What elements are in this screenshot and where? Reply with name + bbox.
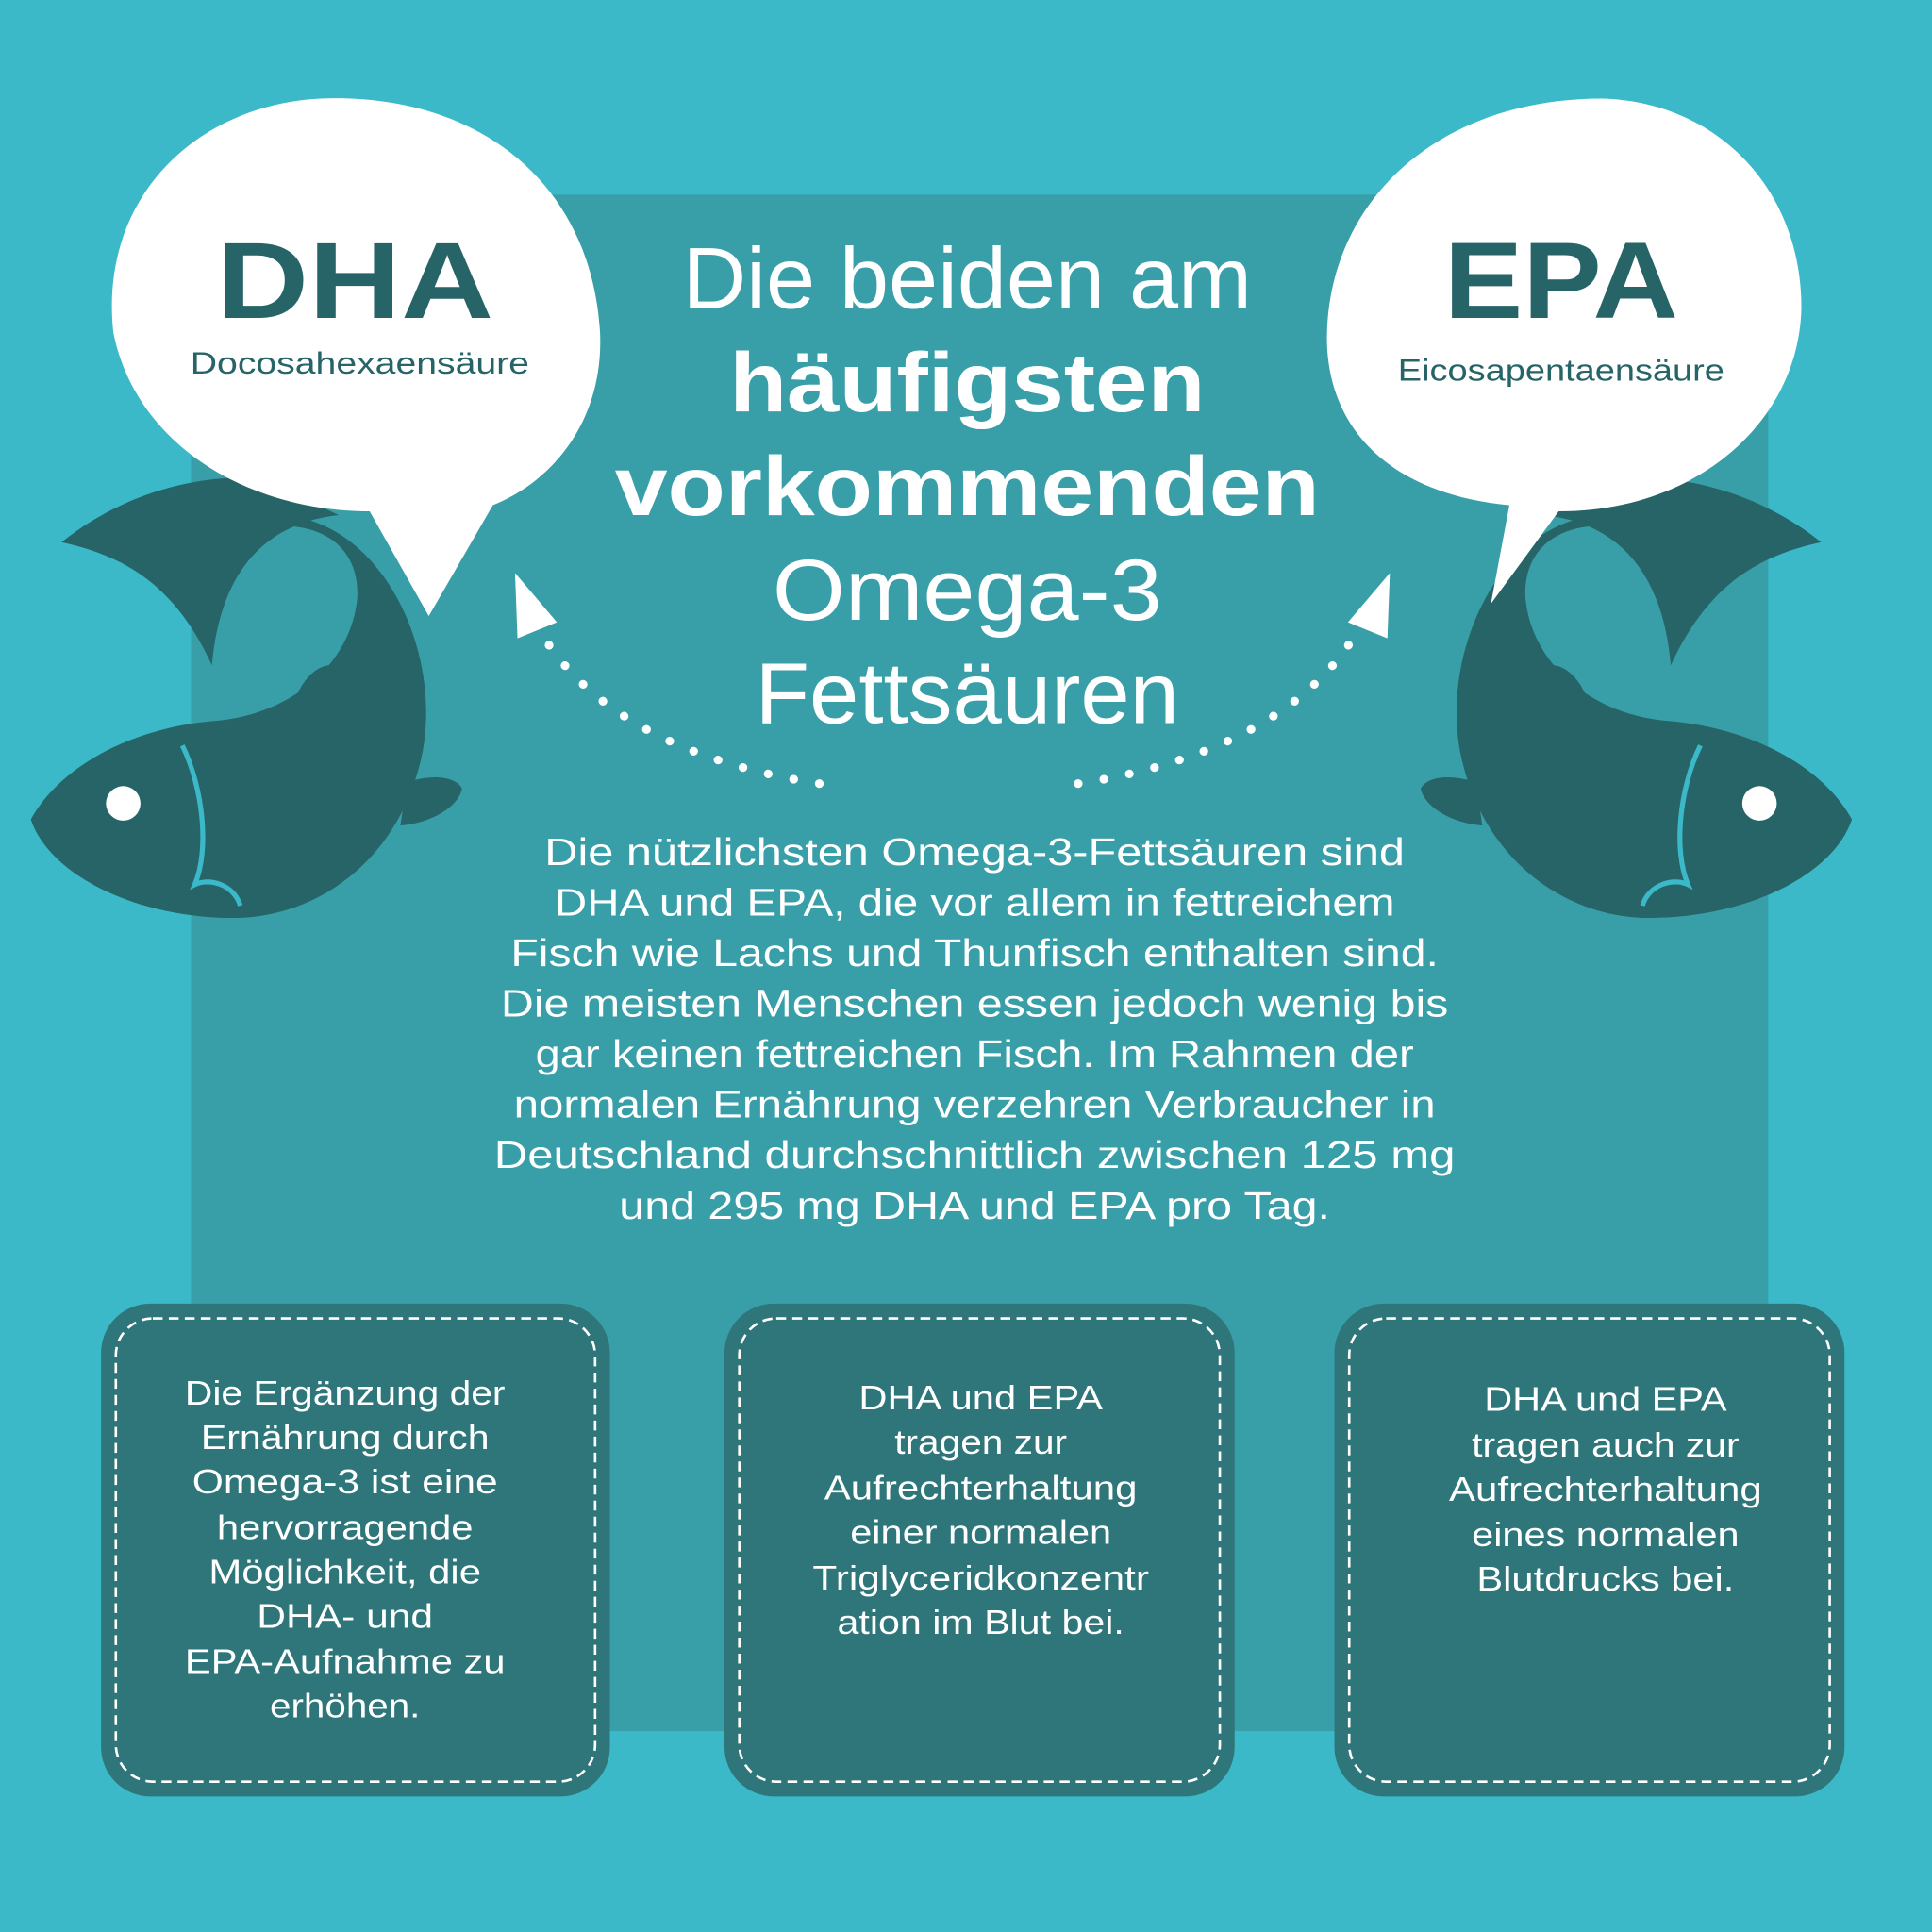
inner panel	[191, 194, 1768, 1731]
box 2	[724, 1304, 1235, 1796]
bubble: EPA: Eicosapentaensäure	[1398, 353, 1724, 388]
box 1: Omega-3 ist eine	[192, 1462, 498, 1501]
bubble: EPA	[1327, 98, 1802, 604]
bubble: DHA	[112, 98, 600, 616]
box 1: Die Ergänzung der	[185, 1374, 506, 1412]
arrow right	[1078, 573, 1390, 784]
bubble: EPA: EPA	[1444, 221, 1678, 341]
box 1	[101, 1304, 610, 1796]
box 2: Triglyceridkonzentr	[812, 1558, 1149, 1597]
box 3: Aufrechterhaltung	[1449, 1470, 1762, 1508]
box 3: Blutdrucks bei.	[1476, 1559, 1734, 1598]
box 1: Ernährung durch	[201, 1418, 490, 1457]
bubble: DHA: DHA	[216, 221, 493, 341]
box 3: tragen auch zur	[1472, 1425, 1740, 1464]
box 1: EPA-Aufnahme zu	[185, 1642, 506, 1681]
box 3: eines normalen	[1472, 1515, 1740, 1554]
box 1: erhöhen.	[270, 1687, 420, 1725]
paragraph: gar keinen fettreichen Fisch. Im Rahmen der	[536, 1032, 1414, 1075]
box 1: hervorragende	[217, 1507, 474, 1546]
paragraph: normalen Ernährung verzehren Verbraucher in	[514, 1083, 1436, 1126]
box 2: tragen zur	[894, 1423, 1067, 1461]
paragraph: Deutschland durchschnittlich zwischen 125 mg	[494, 1133, 1456, 1176]
box 2: DHA und EPA	[858, 1378, 1104, 1417]
title: Omega-3	[773, 542, 1162, 639]
box 1: Möglichkeit, die	[208, 1552, 481, 1591]
box 3: DHA und EPA	[1484, 1380, 1727, 1419]
paragraph: Die meisten Menschen essen jedoch wenig bis	[501, 982, 1448, 1025]
title: häufigsten	[729, 336, 1205, 429]
box 3	[1335, 1304, 1844, 1796]
title: vorkommenden	[615, 440, 1320, 533]
arrow left	[515, 573, 820, 784]
title: Fettsäuren	[756, 646, 1179, 742]
box 2: einer normalen	[850, 1513, 1111, 1552]
title	[615, 231, 1320, 742]
box 1: DHA- und	[257, 1596, 433, 1635]
left fish	[31, 477, 462, 918]
right fish	[1421, 477, 1852, 918]
box 2: ation im Blut bei.	[838, 1603, 1124, 1641]
paragraph: und 295 mg DHA und EPA pro Tag.	[619, 1184, 1330, 1227]
bubble: DHA: Docosahexaensäure	[191, 345, 529, 380]
box 2: Aufrechterhaltung	[824, 1469, 1138, 1507]
paragraph: Fisch wie Lachs und Thunfisch enthalten sind.	[510, 931, 1439, 974]
paragraph	[494, 830, 1456, 1227]
paragraph: Die nützlichsten Omega-3-Fettsäuren sind	[544, 830, 1405, 874]
paragraph: DHA und EPA, die vor allem in fettreichem	[555, 880, 1395, 924]
title: Die beiden am	[683, 231, 1252, 327]
